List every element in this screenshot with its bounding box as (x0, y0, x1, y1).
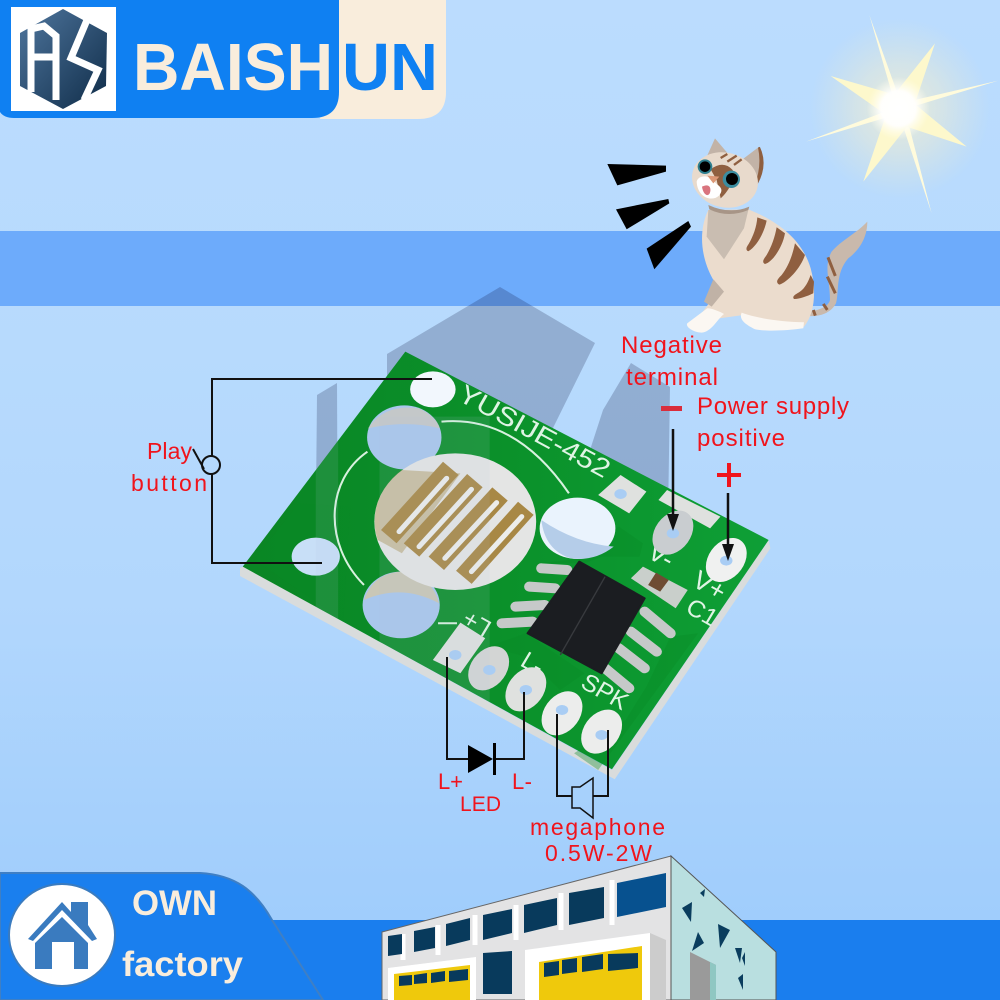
header brand plate (0, 0, 446, 119)
cat tail (808, 222, 867, 316)
logo mark (11, 7, 116, 111)
horizontal blue band (0, 231, 1000, 306)
board text: C1 (681, 594, 722, 632)
IC chip (528, 562, 645, 673)
board edge (240, 540, 770, 779)
cat head (686, 138, 764, 215)
yellow door left (388, 957, 476, 1000)
callout: negative terminal: Negative (621, 332, 722, 359)
IC pins (502, 568, 670, 688)
factory label: OWN (132, 884, 217, 923)
watermark overlay (316, 416, 490, 702)
callout: speaker (530, 714, 665, 866)
factory building (382, 856, 776, 1000)
mounting holes (292, 371, 615, 638)
callout: LED (438, 657, 532, 816)
board text: L- (516, 647, 549, 681)
watermark logo (315, 287, 670, 600)
board text: SPK (576, 669, 633, 716)
yellow door right (525, 933, 666, 1000)
callout: play button: button (131, 470, 207, 496)
callout: LED: L+ (438, 769, 463, 794)
house icon (9, 884, 115, 986)
board text: L+ (458, 605, 496, 641)
board text (453, 379, 732, 716)
copper traces (254, 503, 698, 770)
pads (433, 475, 755, 761)
light sensor (374, 453, 536, 590)
callout: negative terminal (621, 332, 722, 531)
callout: power supply positive: positive (697, 425, 785, 452)
capacitor (631, 567, 688, 608)
callout: power supply positive: Power supply (697, 393, 849, 420)
callout: speaker: 0.5W-2W (545, 840, 652, 866)
factory badge (0, 873, 323, 1000)
board text: V+ (687, 565, 732, 606)
callout: LED: LED (460, 793, 501, 816)
callout: power supply positive (697, 393, 849, 561)
cat body (687, 209, 814, 333)
callout: speaker: megaphone (530, 814, 665, 840)
callout: LED: L- (512, 769, 532, 794)
callout: negative terminal: terminal (626, 364, 718, 391)
sound waves (607, 164, 691, 269)
board face (243, 352, 769, 769)
bottom blue bar (0, 920, 1000, 1000)
callout: play button (131, 379, 432, 563)
PCB module (240, 352, 770, 779)
header brand plate: UN (342, 30, 438, 105)
windows (388, 873, 666, 994)
silk arcs (335, 421, 569, 623)
sun (806, 15, 998, 213)
callout: play button: Play (147, 438, 192, 464)
cat (686, 138, 867, 333)
brand name: BAISH (133, 30, 333, 105)
board text: V- (643, 536, 680, 574)
factory badge: factory (122, 945, 244, 984)
board text: YUSIJE-452 (453, 379, 616, 484)
side wall opening and shapes (682, 889, 745, 1000)
